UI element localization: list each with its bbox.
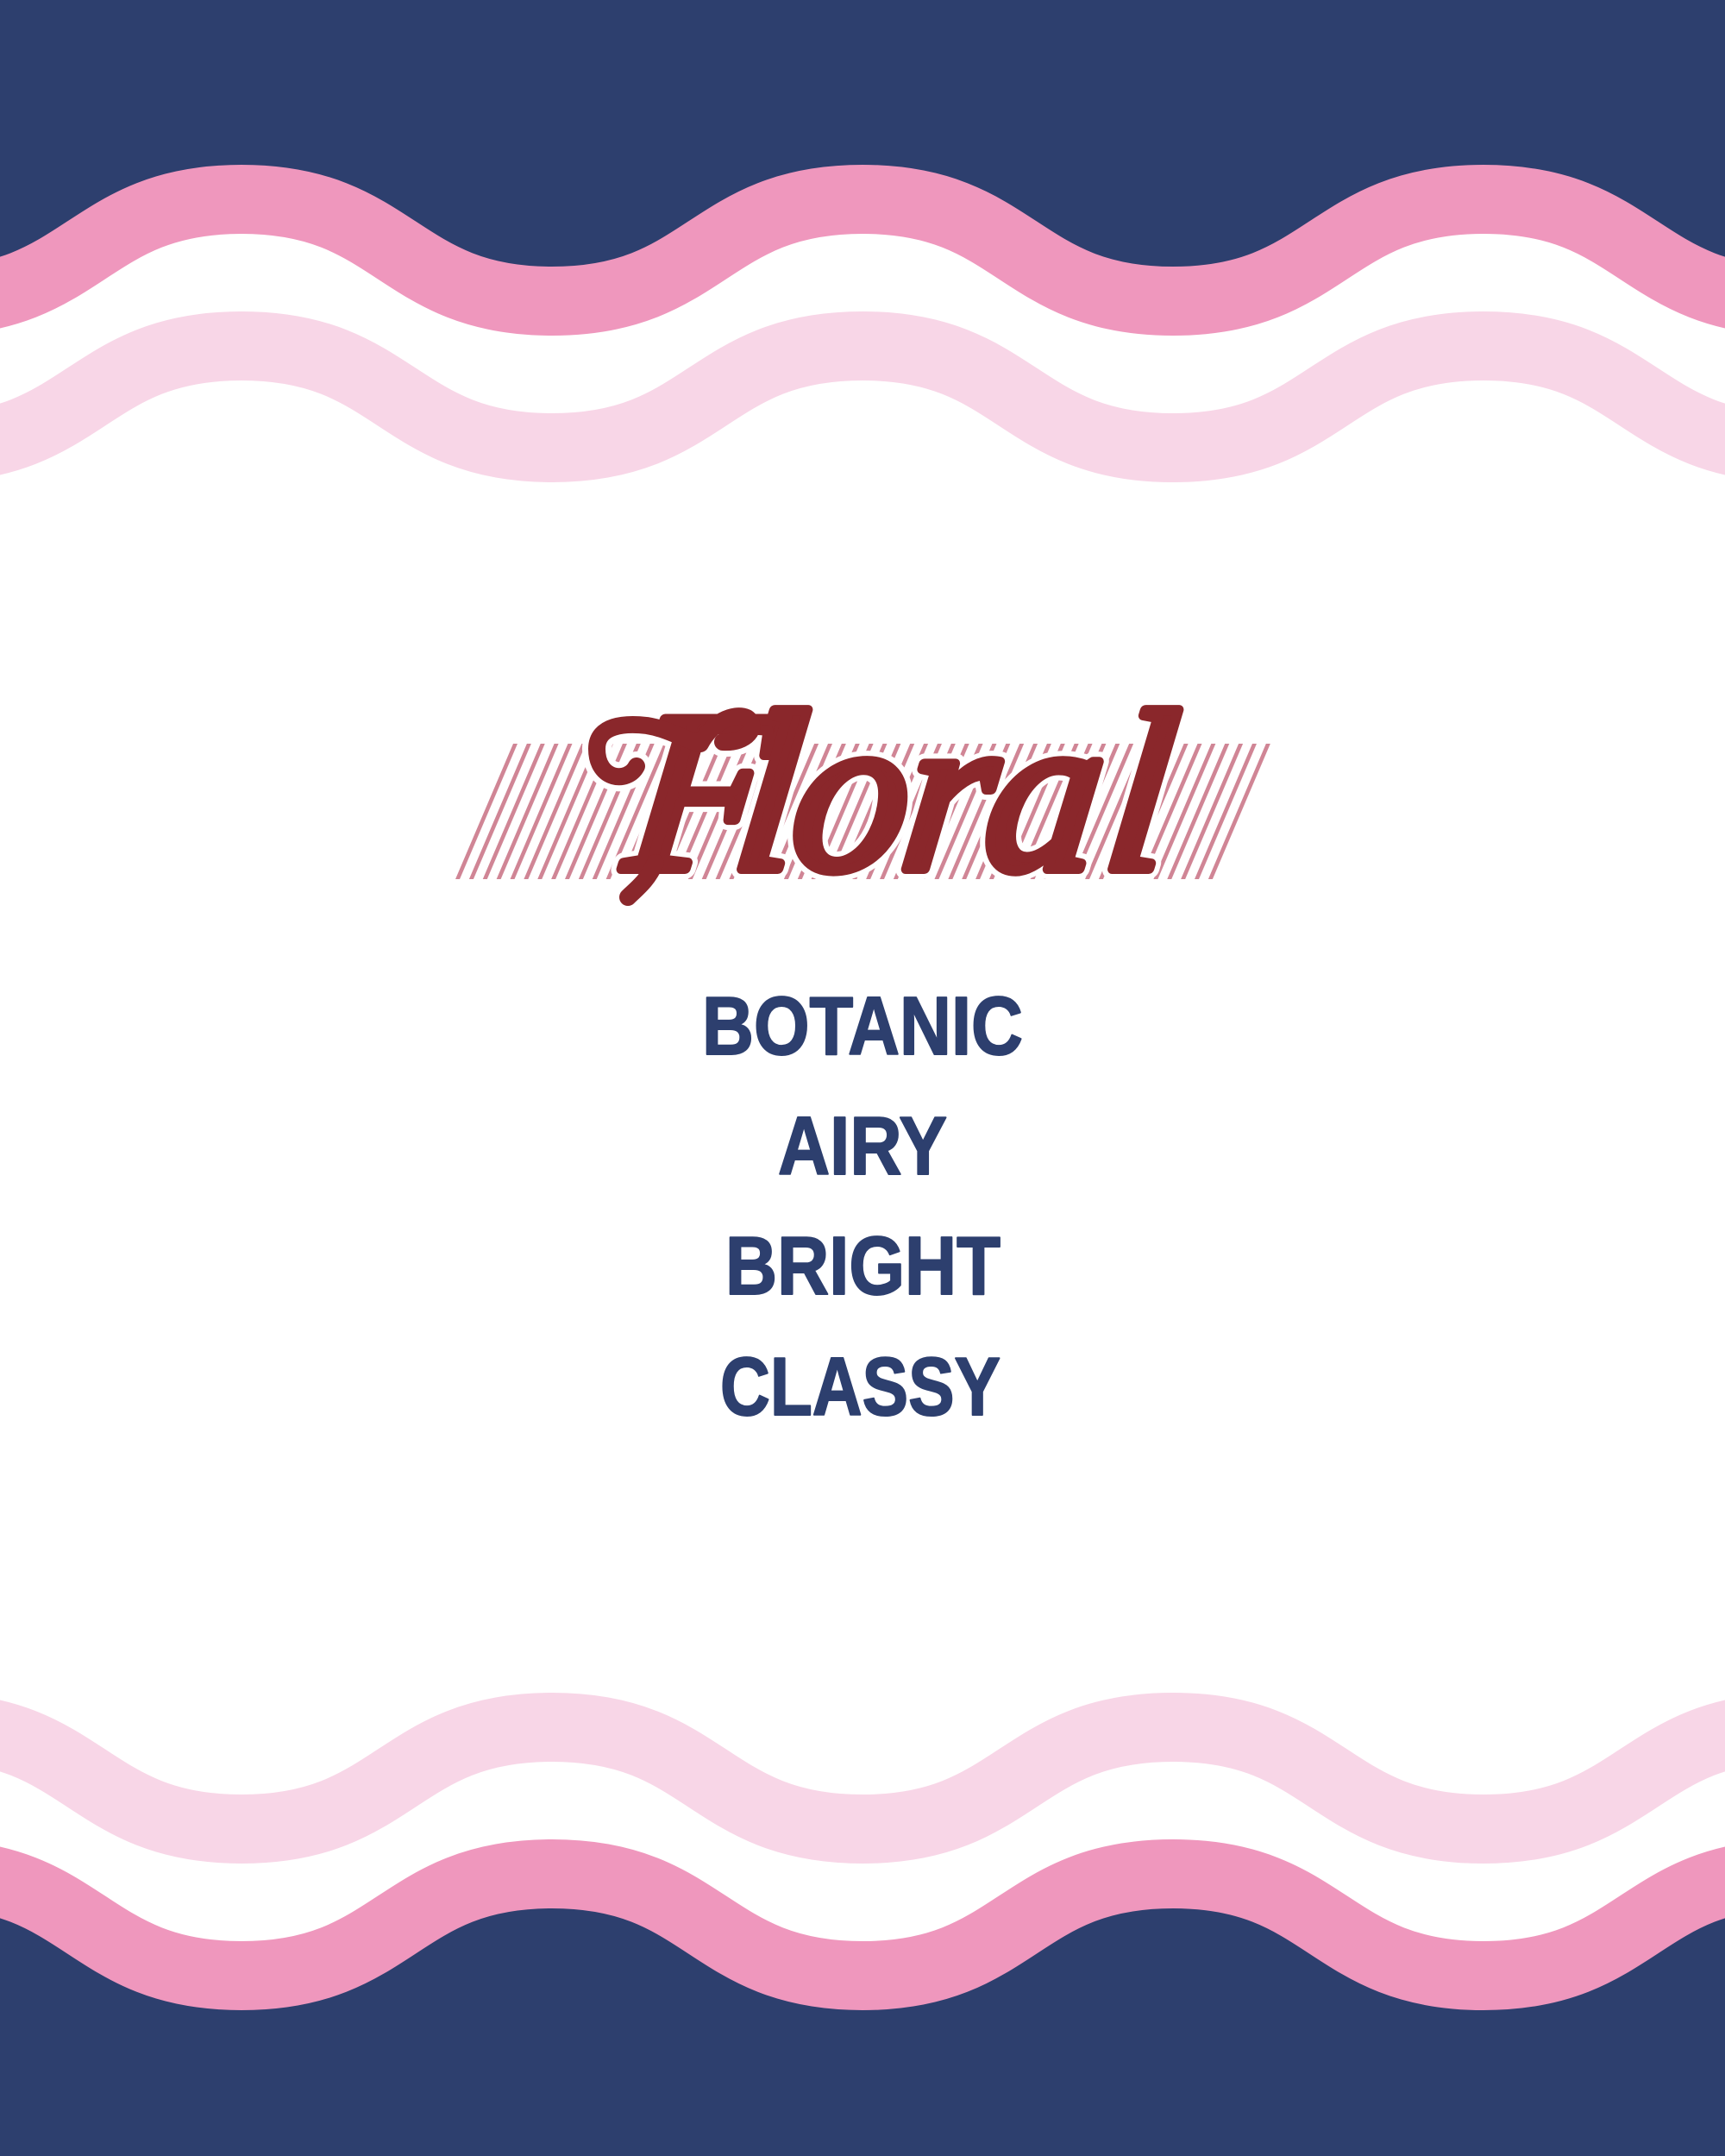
title lettering: Floral [613,665,1189,919]
hatched parallelogram behind title [454,744,1271,879]
navy bottom field [0,1874,1725,2156]
navy top field [0,0,1725,301]
top wave border [0,0,1725,448]
top light pink wave band [0,346,1725,448]
keyword: BOTANIC: BOTANIC [702,980,1023,1072]
keyword: CLASSY: CLASSY [720,1341,1000,1433]
keyword: AIRY: AIRY [778,1100,947,1192]
title halo: Floral [613,665,1189,919]
bottom wave border [0,1727,1725,2156]
bottom light pink wave band [0,1727,1725,1829]
decorative swash [597,716,751,897]
keyword: BRIGHT: BRIGHT [725,1220,1000,1312]
keyword list [702,980,1023,1433]
title: Floral [597,665,1189,919]
top pink wave band [0,199,1725,301]
bottom pink wave band [0,1874,1725,1976]
decorative swash halo [597,716,751,897]
